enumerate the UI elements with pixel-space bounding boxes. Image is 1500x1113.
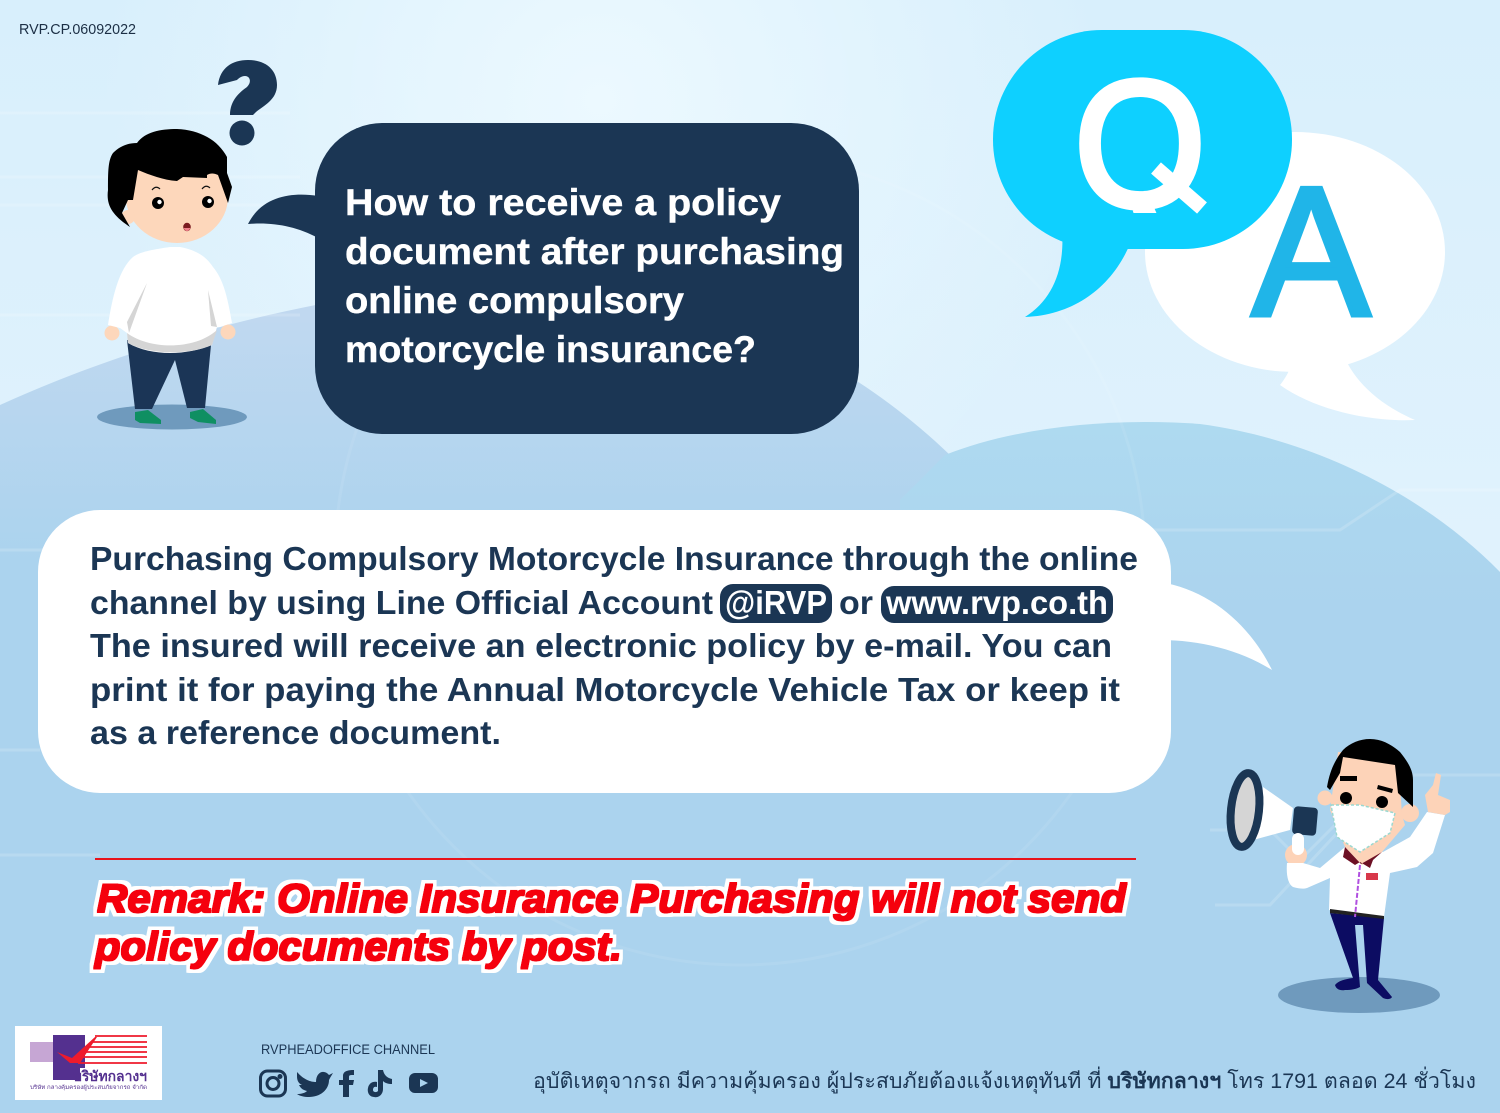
question text xyxy=(345,182,844,370)
answer text: www.rvp.co.th xyxy=(885,584,1108,621)
document code: RVP.CP.06092022 xyxy=(19,22,136,38)
megaphone xyxy=(1227,772,1318,855)
answer text xyxy=(90,540,1138,751)
question text: document after purchasing xyxy=(345,231,844,272)
boy ear xyxy=(121,210,135,224)
man face and neck xyxy=(1330,752,1405,865)
man collar xyxy=(1343,847,1382,868)
boy shadow xyxy=(97,404,247,430)
man zipper and badge xyxy=(1355,865,1378,917)
boy eyes and mouth xyxy=(152,186,214,231)
boy sweater shading xyxy=(127,283,217,352)
character: man with megaphone xyxy=(1227,739,1450,1013)
answer bubble xyxy=(38,510,1272,793)
man ears xyxy=(1318,790,1419,822)
question Q speech bubble xyxy=(993,30,1292,317)
social icons xyxy=(260,1070,438,1097)
man left hand xyxy=(1285,844,1307,866)
character: confused boy xyxy=(97,129,247,430)
question Q speech bubble: Q xyxy=(1074,44,1206,245)
answer A speech bubble: A xyxy=(1252,148,1370,354)
channel label: RVPHEADOFFICE CHANNEL xyxy=(261,1042,435,1057)
icon: tiktok xyxy=(368,1070,392,1097)
answer text: Purchasing Compulsory Motorcycle Insurance through the online xyxy=(90,540,1138,577)
RVP logo: บริษัท กลางคุ้มครองผู้ประสบภัยจากรถ จำกัด xyxy=(30,1084,147,1091)
icon: youtube xyxy=(409,1073,438,1093)
man mask xyxy=(1331,805,1395,852)
answer text: @iRVP xyxy=(725,584,827,621)
remark: policy documents by post. xyxy=(94,925,622,969)
answer text: or xyxy=(839,584,873,621)
question mark icon xyxy=(218,60,277,146)
RVP logo xyxy=(15,1026,162,1100)
man hair xyxy=(1327,739,1413,807)
remark rule xyxy=(95,858,1136,860)
man belt xyxy=(1330,909,1384,919)
answer text: print it for paying the Annual Motorcycle Vehicle Tax or keep it xyxy=(90,671,1120,708)
question bubble xyxy=(248,123,859,434)
icon: facebook xyxy=(339,1070,354,1097)
man eyes xyxy=(1340,776,1393,808)
man trousers xyxy=(1330,913,1392,999)
boy face xyxy=(126,151,228,243)
man right hand xyxy=(1425,773,1450,815)
link pills xyxy=(720,584,1113,623)
boy hair xyxy=(108,129,232,227)
hotline message: อุบัติเหตุจากรถ มีความคุ้มครอง ผู้ประสบภัยต้องแจ้งเหตุทันที ที่ บริษัทกลางฯ โทร 1791 ตลอด 24 ชั่วโมง xyxy=(533,1066,1476,1094)
answer text: channel by using Line Official Account xyxy=(90,584,713,621)
icon: instagram xyxy=(260,1071,286,1096)
boy legs xyxy=(127,340,211,409)
boy shoes xyxy=(135,409,216,424)
icon: twitter xyxy=(297,1072,333,1097)
boy hands xyxy=(104,324,236,340)
man shirt xyxy=(1287,812,1445,917)
man shadow xyxy=(1278,977,1440,1013)
remark: Remark: Online Insurance Purchasing will not send xyxy=(97,877,1128,921)
question text: online compulsory xyxy=(345,280,684,321)
boy sweater xyxy=(108,247,232,353)
RVP logo: บริษัทกลางฯ xyxy=(73,1068,147,1084)
remark xyxy=(94,877,1128,969)
question text: motorcycle insurance? xyxy=(345,329,756,370)
answer text: as a reference document. xyxy=(90,714,501,751)
question text: How to receive a policy xyxy=(345,182,781,223)
answer text: The insured will receive an electronic policy by e-mail. You can xyxy=(90,627,1112,664)
answer A speech bubble xyxy=(1145,132,1445,420)
